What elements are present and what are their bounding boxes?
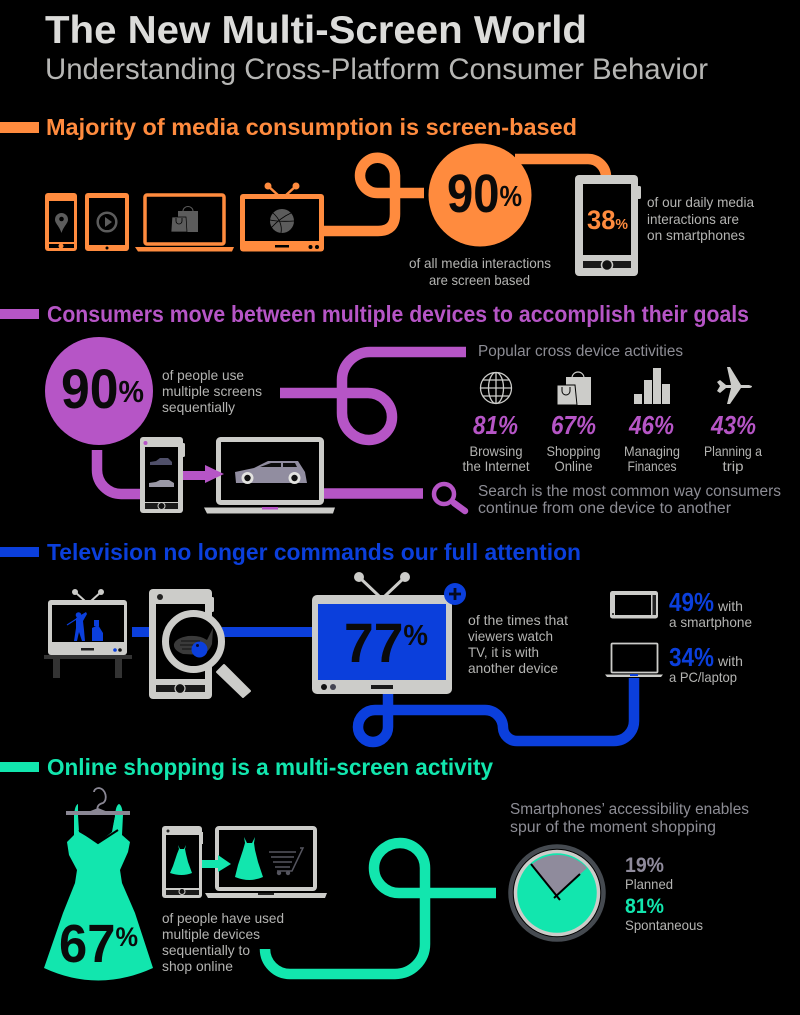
icon: large TV with 77%: [312, 572, 466, 694]
connector pipe: circle to phone: [515, 159, 606, 177]
stat: trip: trip: [722, 458, 744, 474]
caption: 67%: of people have used: [162, 910, 284, 926]
stat: trip: [704, 410, 762, 474]
stat circle: 90%: [428, 144, 532, 246]
icon: large TV with 77%: 77: [344, 611, 406, 674]
stat circle: 90%: %: [499, 181, 522, 213]
stat: smartphone: with: [717, 598, 743, 614]
stat: trip: Planning a: [704, 443, 762, 459]
stat circle: 90%: [45, 337, 153, 445]
callout: search: Search is the most common way consumers: [478, 483, 781, 500]
stat: laptop: 34%: [669, 642, 714, 672]
icon: phone under magnifier with golf club: [149, 589, 250, 699]
icon: phone with 38%: [575, 175, 641, 276]
title: The New Multi-Screen World: [45, 9, 587, 52]
caption: 77%: TV, it is with: [468, 644, 539, 660]
stat: laptop: a PC/laptop: [669, 669, 737, 685]
stat: smartphone: [669, 587, 752, 630]
stat: shopping: Online: [554, 458, 593, 474]
connector pipe: six loop: [280, 352, 466, 440]
heading bar: [0, 762, 39, 772]
stat: laptop: with: [717, 653, 743, 669]
stat: finances: Managing: [624, 443, 680, 459]
icon: shopping bag: [557, 372, 591, 405]
caption: 77%: [468, 612, 568, 676]
heading bar: [0, 547, 39, 557]
icon: airplane: [717, 367, 752, 404]
stat circle: 90%: 90: [447, 164, 507, 224]
caption: 90%: multiple screens: [162, 383, 262, 399]
stat: browsing: Browsing: [470, 443, 522, 459]
stat: smartphone: 49%: [669, 587, 714, 617]
icon: tablet with play button: [85, 193, 129, 251]
caption: 90%: of all media interactions: [409, 255, 551, 271]
arrow: phone to laptop: [202, 855, 231, 872]
panel: multiple devices: [0, 301, 781, 517]
stat: finances: 46%: [628, 410, 674, 440]
stat: spontaneous: [625, 895, 703, 933]
icon: large TV with 77%: %: [403, 620, 428, 652]
stat: spontaneous: Spontaneous: [625, 917, 703, 933]
chart: clock pie: [510, 846, 604, 940]
connector pipe: circle to phone: [97, 450, 142, 494]
stat: finances: Finances: [628, 458, 676, 474]
icon: laptop with shopping bags: [135, 195, 234, 252]
icon: dress on hanger with 67%: 67: [59, 914, 119, 974]
icon: magnifier: [434, 484, 465, 511]
caption: 67%: sequentially to: [162, 942, 250, 958]
stat: spontaneous: 81%: [625, 895, 664, 918]
callout: search: [478, 483, 781, 517]
sub-heading: spur of the moment: Smartphones’ accessibility enables: [510, 801, 749, 818]
stat: shopping: Shopping: [546, 443, 600, 459]
caption: 90%: sequentially: [162, 399, 235, 415]
connector pipe: TV to laptop: [358, 678, 634, 742]
icon: phone with cars: [140, 437, 185, 513]
caption: 90%: are screen based: [429, 272, 530, 288]
icon: bar chart: [634, 368, 670, 404]
heading: Television no longer commands our full attention: [47, 539, 581, 565]
subtitle: Understanding Cross-Platform Consumer Behavior: [45, 53, 708, 86]
caption: 67%: multiple devices: [162, 926, 260, 942]
caption: 67%: [162, 910, 284, 974]
caption: 38%: interactions are: [647, 211, 739, 227]
stat: shopping: 67%: [551, 410, 596, 440]
icon: TV with basketball: [240, 182, 324, 252]
panel: media consumption: [0, 114, 754, 288]
icon: landscape smartphone: [610, 591, 658, 618]
heading bar: [0, 122, 39, 133]
arrow: phone to laptop: [183, 465, 224, 483]
stat: planned: [625, 854, 673, 892]
stat: planned: 19%: [625, 854, 664, 877]
caption: 38%: [647, 194, 754, 243]
sub-heading: popular activities: Popular cross device activities: [478, 343, 683, 360]
icon: laptop: [605, 644, 663, 677]
caption: 67%: shop online: [162, 958, 233, 974]
heading bar: [0, 309, 39, 319]
stat: shopping: [546, 410, 600, 474]
icon: dress on hanger with 67%: [44, 788, 153, 980]
stat circle: 90%: 90: [61, 357, 123, 420]
caption: 90%: of people use: [162, 367, 244, 383]
stat circle: 90%: %: [119, 374, 144, 409]
icon: laptop with dress and cart: [205, 828, 327, 898]
stat: planned: Planned: [625, 876, 673, 892]
panel: online shopping: [0, 754, 749, 980]
caption: 77%: another device: [468, 660, 558, 676]
stat: browsing: the Internet: [462, 458, 530, 474]
caption: 77%: of the times that: [468, 612, 568, 628]
connector pipe: laptop to search: [322, 488, 423, 499]
icon: small TV with golfer on table: [44, 589, 132, 678]
stat: laptop: [669, 642, 743, 685]
heading: Online shopping is a multi-screen activity: [47, 754, 493, 780]
icon: laptop with car: [204, 440, 335, 514]
stat: browsing: [462, 410, 530, 474]
panel: television: [0, 539, 752, 742]
heading: Consumers move between multiple devices to accomplish their goals: [47, 301, 749, 327]
icon: dress on hanger with 67%: %: [115, 922, 138, 952]
callout: search: continue from one device to another: [478, 500, 731, 517]
caption: 38%: of our daily media: [647, 194, 754, 210]
connector pipe: text to clock: [265, 843, 496, 974]
stat: trip: 43%: [710, 410, 756, 440]
icon: globe: [480, 372, 512, 404]
caption: 38%: on smartphones: [647, 227, 745, 243]
connector pipe: TV to circle: [322, 158, 424, 231]
sub-heading: spur of the moment: spur of the moment shopping: [510, 819, 716, 836]
connector pipe: small TV to large TV: [132, 627, 313, 637]
heading: Majority of media consumption is screen-based: [46, 114, 577, 140]
sub-heading: spur of the moment: [510, 801, 749, 836]
icon: phone with map pin: [45, 193, 77, 251]
caption: 90%: [162, 367, 262, 415]
stat: finances: [624, 410, 680, 474]
caption: 77%: viewers watch: [468, 628, 553, 644]
stat: smartphone: a smartphone: [669, 614, 752, 630]
icon: phone with 38%: 38%: [587, 205, 628, 235]
caption: 90%: [409, 255, 551, 288]
icon: phone with dress: [162, 826, 203, 898]
stat: browsing: 81%: [473, 410, 518, 440]
